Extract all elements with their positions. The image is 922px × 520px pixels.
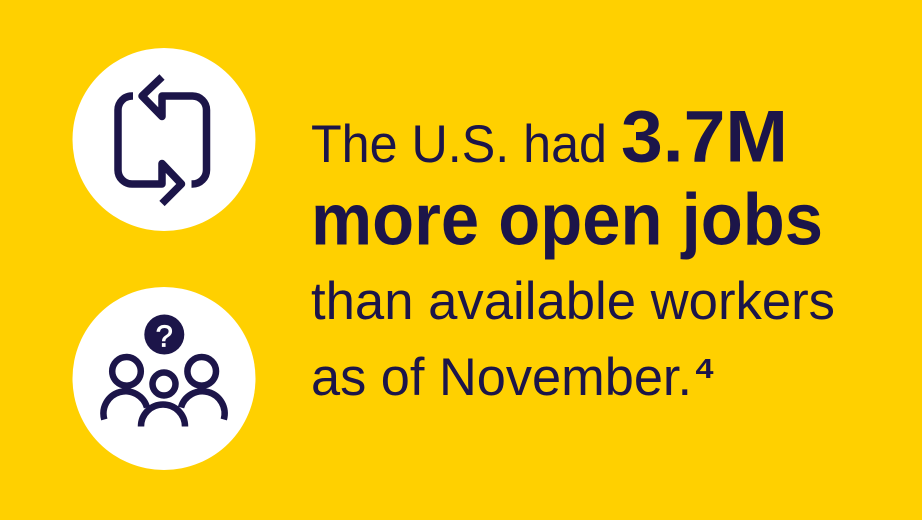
line 2: more open jobs: more open jobs xyxy=(311,180,823,260)
line 3: than available workers: than available workers xyxy=(311,272,835,331)
question mark badge xyxy=(144,314,184,354)
people xyxy=(103,357,225,426)
headline text xyxy=(311,97,835,407)
line 1: The U.S. had 3.7M: 3.7M xyxy=(621,97,788,178)
icon: group of people with question mark xyxy=(72,287,256,470)
icon: circular exchange arrows xyxy=(72,48,256,231)
line 4: as of November. with footnote: as of November. xyxy=(311,348,692,407)
line 4: as of November. with footnote: 4 xyxy=(696,353,714,384)
question mark badge: ? xyxy=(156,318,173,354)
line 1: The U.S. had 3.7M: The U.S. had xyxy=(311,115,607,174)
line 1: The U.S. had 3.7M xyxy=(311,97,788,178)
